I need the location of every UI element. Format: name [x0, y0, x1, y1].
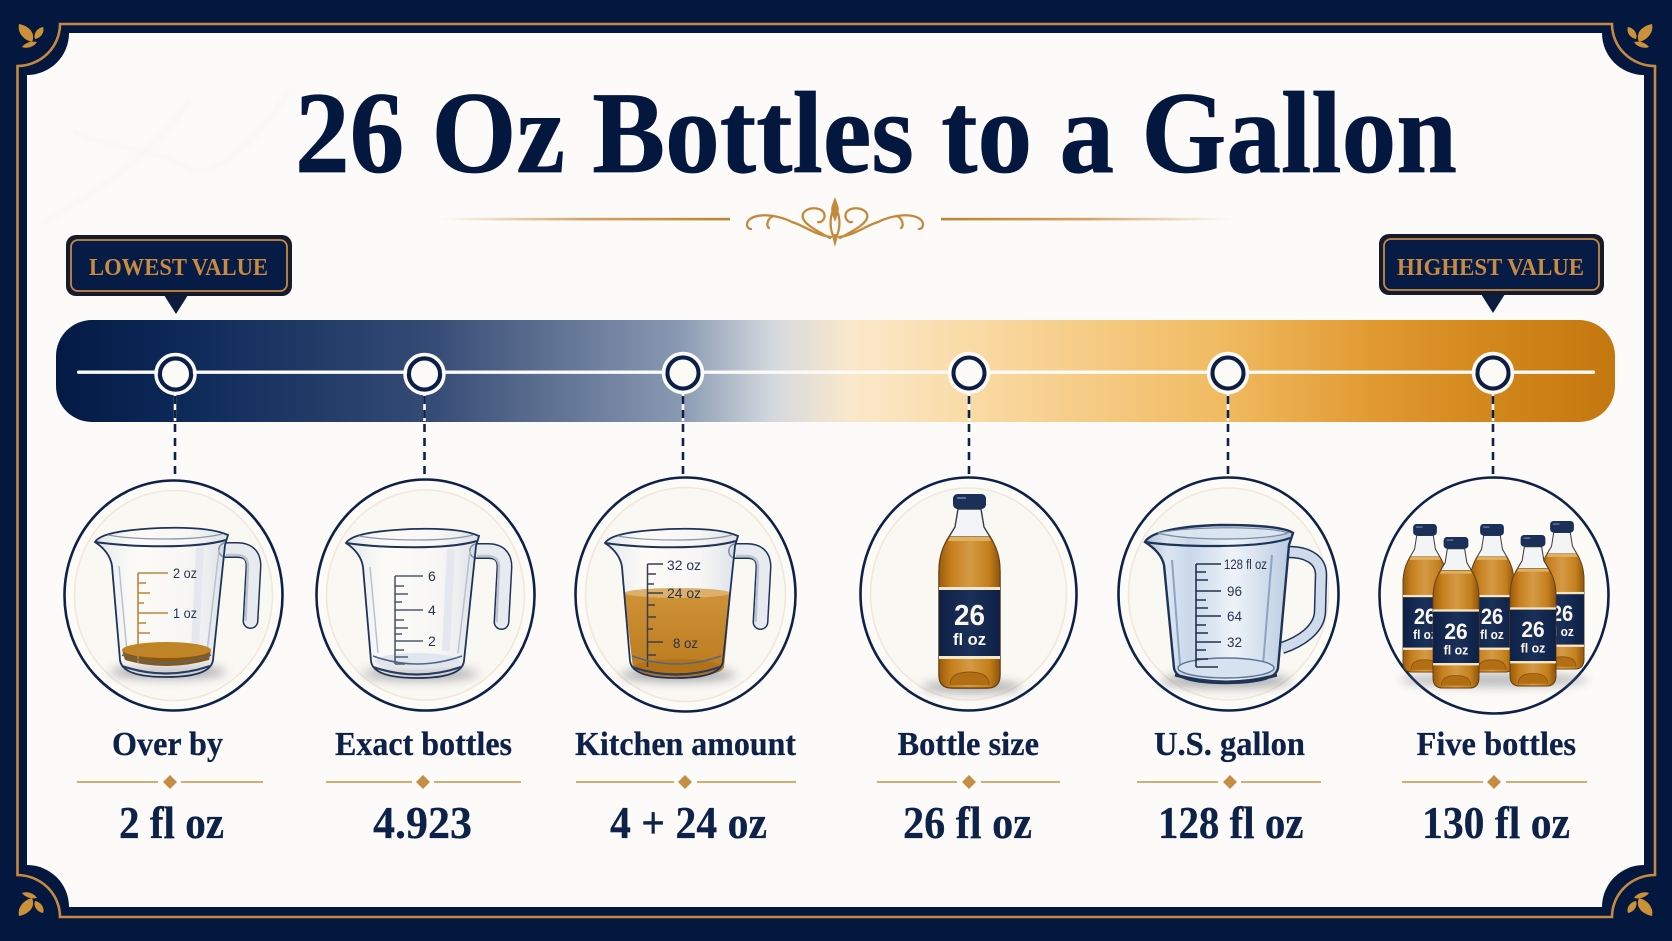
dashed connectors [175, 394, 1493, 474]
divider [877, 775, 1060, 789]
icon: group of five bottles: fl oz [1413, 628, 1437, 642]
icon: group of five bottles: 26 [1444, 619, 1468, 644]
icon: group of five bottles: fl oz [1480, 628, 1504, 642]
divider [326, 775, 521, 789]
label: U.S. gallon [1154, 726, 1305, 763]
icon: group of five bottles: 26 [1414, 604, 1436, 629]
icon: 26 fl oz bottle [922, 494, 1022, 693]
label: Kitchen amount [575, 726, 797, 763]
title ornament divider [441, 197, 1230, 247]
label: Over by [112, 726, 223, 763]
value: 2 fl oz [119, 797, 224, 848]
value: 4.923 [373, 797, 472, 848]
icon: gallon measuring cup: 128 fl oz [1224, 556, 1267, 572]
value: 130 fl oz [1422, 797, 1570, 848]
callout: lowest value: LOWEST VALUE [89, 255, 268, 281]
item 1: over by [64, 480, 282, 848]
divider [1137, 775, 1321, 789]
icon: group of five bottles: fl oz [1521, 640, 1546, 656]
divider [576, 775, 796, 789]
divider [77, 775, 263, 789]
icon: measuring cup with liquid: 24 oz [667, 585, 701, 601]
icon: group of five bottles [1399, 521, 1589, 688]
icon: empty measuring cup: 2 [428, 633, 436, 649]
item 5: U.S. gallon [1118, 478, 1338, 848]
scale nodes [160, 358, 1508, 390]
item 4: bottle size [860, 478, 1076, 848]
icon: measuring cup with small amount: 2 oz [173, 565, 197, 581]
title: 26 Oz Bottles to a Gallon [295, 69, 1457, 198]
callout: lowest value [66, 235, 292, 314]
icon: measuring cup with liquid: 32 oz [667, 557, 701, 573]
icon: measuring cup with small amount [95, 528, 254, 679]
icon: 26 fl oz bottle: 26 [954, 600, 985, 632]
icon: measuring cup with liquid [605, 529, 764, 682]
callout: highest value [1379, 234, 1604, 313]
divider [1402, 775, 1587, 789]
icon: group of five bottles: 26 [1481, 604, 1503, 629]
label: Five bottles [1416, 726, 1576, 763]
icon: group of five bottles: 26 [1521, 617, 1545, 642]
value: 128 fl oz [1158, 797, 1304, 848]
gradient scale bar [56, 320, 1615, 422]
icon: empty measuring cup: 6 [428, 568, 436, 584]
icon: 26 fl oz bottle: fl oz [953, 630, 986, 649]
icon: measuring cup with liquid: 8 oz [673, 635, 698, 651]
icon: gallon measuring cup: 32 [1227, 634, 1242, 650]
icon: measuring cup with small amount: 1 oz [173, 605, 197, 621]
value: 26 fl oz [903, 797, 1032, 848]
icon: empty measuring cup: 4 [428, 602, 436, 618]
label: Exact bottles [335, 726, 512, 763]
icon: gallon measuring cup [1145, 525, 1321, 688]
item 2: exact bottles [316, 480, 534, 848]
item 6: five bottles [1380, 478, 1608, 848]
item 3: kitchen amount [575, 478, 797, 848]
icon: group of five bottles: 26 [1551, 601, 1573, 626]
icon: gallon measuring cup: 64 [1227, 608, 1242, 624]
callout: highest value: HIGHEST VALUE [1397, 255, 1584, 281]
icon: group of five bottles: fl oz [1550, 625, 1574, 639]
icon: group of five bottles: fl oz [1444, 642, 1469, 658]
icon: empty measuring cup [346, 529, 504, 681]
value: 4 + 24 oz [610, 797, 767, 848]
label: Bottle size [898, 726, 1039, 763]
icon: gallon measuring cup: 96 [1227, 583, 1242, 599]
